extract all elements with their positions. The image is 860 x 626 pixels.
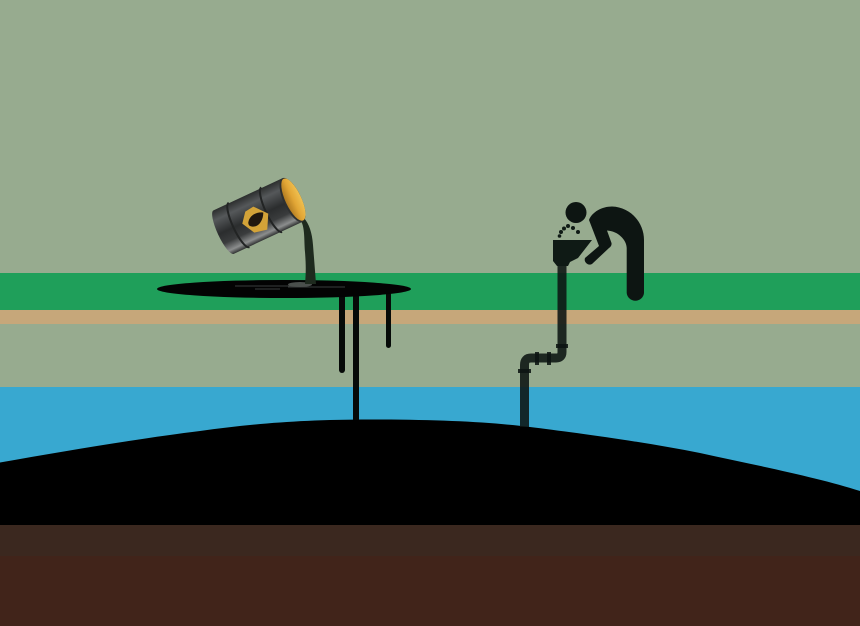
sand band bbox=[0, 310, 860, 324]
water table band bbox=[0, 387, 860, 507]
icon: tipped oil barrel bbox=[208, 174, 311, 257]
drinking fountain pipe bbox=[518, 262, 568, 427]
oil drips through the ground bbox=[339, 292, 391, 420]
lower soil layer bbox=[0, 556, 860, 626]
upper soil layer bbox=[0, 525, 860, 556]
icon: barrel label with oil drop bbox=[242, 207, 268, 233]
grass band bbox=[0, 273, 860, 310]
icon: drinking fountain basin bbox=[553, 240, 592, 266]
oil stream pouring from barrel bbox=[301, 218, 316, 284]
icon: water droplets bbox=[558, 224, 580, 238]
underground oil mass bbox=[0, 420, 860, 525]
icon: person drinking bbox=[566, 202, 644, 301]
oil slick on the surface bbox=[157, 280, 411, 298]
